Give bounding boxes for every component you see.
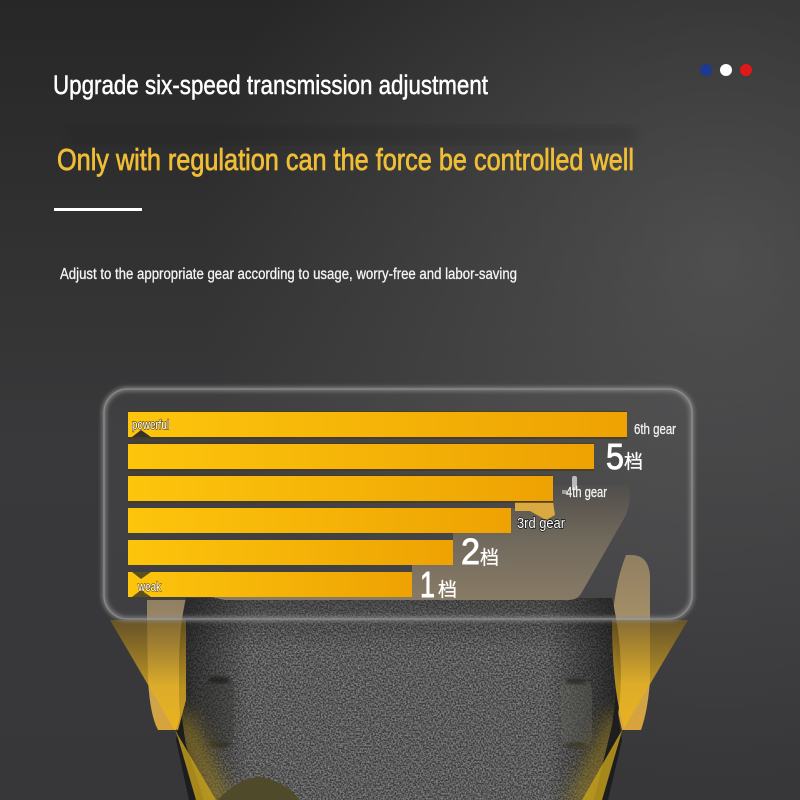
bar 6th gear: 6th gear [634,422,676,438]
bar 1st gear [128,564,457,605]
left side knob [147,600,186,730]
tool lower body [176,598,622,800]
bar 3rd gear: 3rd gear [517,516,565,532]
bar 4th gear [128,475,607,503]
bar 1st gear: 1 [420,564,435,605]
subtitle: Only with regulation can the force be controlled well [57,142,634,177]
grip shading [179,598,617,800]
textured grip [179,598,617,800]
bar 5th gear: 5 [606,436,624,477]
finger groove left [204,676,234,748]
bar 5th gear: 档 [624,451,643,473]
bar 4th gear: 4th gear [566,485,607,501]
yellow edge left [175,730,216,800]
yellow light beam left [110,620,186,730]
bar 3rd gear [128,508,565,533]
bar chart: gears [128,411,676,605]
description: Adjust to the appropriate gear according to usage, worry-free and labor-saving [60,266,517,283]
yellow glow on grip [170,715,630,800]
bar 1st gear: 档 [438,579,457,601]
colour dots [700,64,752,76]
bar 6th gear: powerful [132,418,169,432]
bar 1st gear: weak [137,580,162,594]
yellow light beam right [612,620,688,728]
tool head behind panel [212,476,630,600]
bar 2nd gear: 档 [480,547,499,569]
finger groove right [561,677,592,748]
bar 2nd gear [128,531,499,572]
glass panel [104,389,692,619]
divider [54,208,142,211]
bar 5th gear [128,436,643,477]
bar 2nd gear: 2 [461,531,480,572]
heading: Upgrade six-speed transmission adjustment [53,70,488,100]
right side knob [612,555,650,730]
bar 6th gear [128,411,676,439]
yellow edge right [582,730,622,800]
trigger recess [218,777,300,800]
power tool body [110,555,688,800]
